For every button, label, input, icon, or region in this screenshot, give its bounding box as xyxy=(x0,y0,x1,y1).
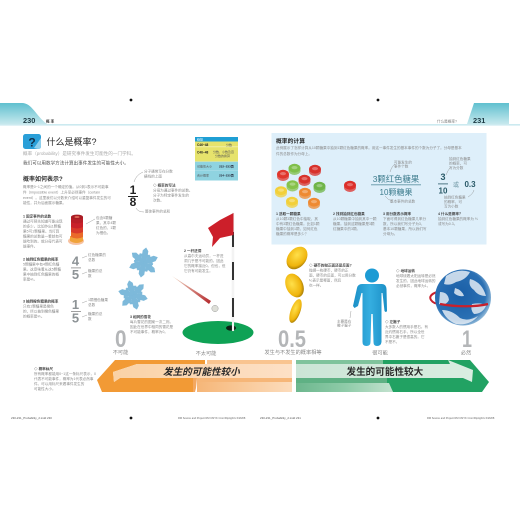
label: likely: 很可能 xyxy=(372,348,388,356)
panel steps: 基本10颗糖果，所以我们写 xyxy=(383,226,427,231)
text: probability scale: 代表不可能事件，概率为1代表必然事 xyxy=(34,376,94,381)
fraction: 3/10 or 0.3: 的概率，可 xyxy=(444,199,462,204)
table: 分数的换算 xyxy=(215,153,230,158)
registration marks: 230-231_Probability_2.indd 231 xyxy=(260,416,301,420)
text: coin note xyxy=(309,262,356,288)
text: red candy probability: 2 抽到红色糖果的概率 xyxy=(23,256,59,262)
fraction: 3/10 or 0.3: 抽到红色糖果 xyxy=(444,194,466,200)
text: earth note xyxy=(396,268,436,288)
fraction: 1/5: 1 xyxy=(72,297,79,312)
panel steps: 下面可得到红色糖果几率分 xyxy=(383,216,427,221)
label: unlikely: 不太可能 xyxy=(196,349,216,357)
intro text xyxy=(23,150,136,166)
icon: single red candy xyxy=(344,181,356,192)
fraction: 1/8 with notes: 分母为通过事件的总数。 xyxy=(153,188,193,192)
text: snow note: 每片雪花的图案一次二则。 xyxy=(130,319,173,324)
fraction: 1/8 with notes: 次数。 xyxy=(153,198,164,202)
text: probability scale: 件。可以用标尺来看事件发生的 xyxy=(34,381,85,386)
fraction: 3/10 or 0.3: 3 xyxy=(440,172,446,182)
callout: right handed xyxy=(337,311,352,328)
text: red candy probability: 果。这意味着从这5颗糖 xyxy=(23,266,61,272)
number: 0 impossible: 不可能 xyxy=(113,348,128,356)
panel steps: 红糖果中的3颗。 xyxy=(333,226,360,231)
text: left-handed note: 近约惯用右手，所以全世 xyxy=(385,329,425,334)
fraction: 3 red candies over 10 candies: 基本事件的总数 xyxy=(390,198,416,204)
panel steps: 糖果的概率是多少？ xyxy=(276,231,308,236)
fraction: 1/8 with notes xyxy=(128,168,193,214)
fraction: 1/5: 数 xyxy=(88,316,92,321)
panel: calculating probability xyxy=(272,133,486,244)
panel steps: 3 用分数表示概率 xyxy=(383,211,412,216)
table: C46~48 xyxy=(197,150,208,154)
fraction: 3/10 or 0.3: 0.3 xyxy=(464,180,476,189)
text: golf note: 它的概率接近0。但也，但 xyxy=(184,263,226,268)
text: probability scale: 可能性大小。 xyxy=(34,386,56,391)
icon: question mark: ? xyxy=(28,136,36,150)
panel heading: 概率的计算 xyxy=(276,137,305,145)
icon: golf ball with trail xyxy=(172,276,218,312)
text: coin note: 也一样。 xyxy=(309,282,323,288)
text: coin note: 面，硬币的反面，可以用分数 xyxy=(309,272,356,278)
page header left: 230 xyxy=(23,116,35,125)
text: candy tube: 的多少。比如作出1颗糖 xyxy=(23,224,61,228)
text: probability scale xyxy=(34,366,96,391)
arrow: more likely: 发生的可能性较大 xyxy=(346,366,424,378)
page header right xyxy=(437,103,509,125)
fraction: 1/5: 5 xyxy=(72,310,79,326)
fraction: 4/5 xyxy=(71,252,106,282)
panel steps: 糖果中抽到1颗，如何红色 xyxy=(276,226,318,231)
text: earth note: 发生的，因此地球运转的 xyxy=(396,278,436,283)
text: coin note: ◇ 硬币的抛正面还是反面? xyxy=(309,262,352,268)
fraction: 1/8 with notes: 分子通常写在分数 xyxy=(144,168,173,174)
icon: snowflakes xyxy=(114,245,162,314)
text: golf note: 2 一杆进洞 xyxy=(184,248,202,253)
page header right: 231 xyxy=(473,116,485,125)
table: 分数、小数及百 xyxy=(213,149,234,154)
number: 1 certain: 1 xyxy=(462,326,472,353)
text: red candy probability: 5颗糖果中有4颗红色糖 xyxy=(23,262,60,266)
panel steps: 从10颗糖果中抽到其中一颗 xyxy=(333,216,377,221)
callout: candy stack: 红色的，1颗 xyxy=(96,225,116,230)
fraction: 1/5: 总数 xyxy=(88,302,96,307)
text: probability scale: ◇ 概率标尺 xyxy=(34,366,53,371)
registration marks xyxy=(11,99,495,420)
text: earth note: 地球绕着太阳运转是必然 xyxy=(396,273,436,278)
page header right: 什么是概率? xyxy=(437,118,457,124)
text: orange candy probability: 的概率是⅕。 xyxy=(23,314,44,318)
number: 0 impossible: 0 xyxy=(115,326,126,353)
number: 1 certain xyxy=(461,326,472,356)
page header left xyxy=(0,103,520,125)
text: orange candy probability: 3 抽到橙色糖果的概率 xyxy=(23,298,59,304)
text: snow note: 不可能事件，概率为0。 xyxy=(130,329,168,334)
fraction: 3/10 or 0.3: 写为小数 xyxy=(444,204,459,208)
section: how to express probability: 件（impossible event）上升至必然事件（certain xyxy=(23,189,100,194)
panel intro text: 此例展示了怎样计算从10颗糖果中抽到1颗红色糖果的概率。用这一事件发生的基本事件的个数为分子了。分母是基本 xyxy=(276,145,462,150)
text: left-handed note: ◇ 左撇子 xyxy=(385,319,401,324)
fraction: 3/10 or 0.3 xyxy=(438,156,476,208)
fraction: 4/5: 数 xyxy=(88,273,92,278)
fraction: 1/8 with notes: 分子为特定事件发生的 xyxy=(153,192,189,198)
fraction: 3/10 or 0.3: 写为分数 xyxy=(449,165,464,170)
text: candy tube: 通过可预先知道可能出现 xyxy=(23,218,63,224)
table: 234~235页 xyxy=(219,174,234,178)
icon: falling coins xyxy=(282,243,312,324)
callout: candy stack: 为橙色。 xyxy=(96,230,110,235)
panel steps: 中有3颗红色糖果。比如1颗 xyxy=(276,221,320,226)
text: earth note: ◇ 地球运转 xyxy=(396,268,415,273)
text: left-handed note: 不是不。 xyxy=(385,339,399,344)
text: earth note: 必然事件，概率为1。 xyxy=(396,283,430,288)
text: golf note xyxy=(184,248,226,273)
fraction: 3/10 or 0.3: 抽到红色糖果 xyxy=(449,156,471,161)
fraction: 1/8 with notes: 1 xyxy=(130,183,137,197)
icon: golf flag and green xyxy=(182,213,254,344)
text: snow note: 因此在世界中相同的雪花是 xyxy=(130,324,174,329)
fraction: 1/8 with notes: 整体事件的总和 xyxy=(145,208,171,214)
registration marks: 230-231_Probability_2.indd 230 xyxy=(11,416,52,420)
fraction: 3 red candies over 10 candies: 事件个数 xyxy=(394,164,409,168)
intro text: 概率（probability）是研究事件发生可能性的一门学科。 xyxy=(23,150,136,157)
title: 什么是概率? xyxy=(46,136,97,147)
arrow: less likely: 发生的可能性较小 xyxy=(163,366,240,378)
table: 合计概率 xyxy=(197,172,209,178)
text: golf note: 洞几乎是不可能的。因此 xyxy=(184,258,224,263)
text: left-handed note: 界中右撇子是很高的。它 xyxy=(385,334,425,339)
fraction: 1/5: 1颗橙色糖果 xyxy=(88,297,108,302)
registration marks: RM Source and Project RM CMYK Cron/Fliptight/x 6/26/08 xyxy=(427,416,495,420)
callout: candy stack: 包含5颗糖 xyxy=(96,215,113,220)
section: how to express probability: event）。这里我们以分数来介绍可以重复事件发生的可 xyxy=(23,195,111,200)
number: 0.5 even: 发生与不发生的概率相等 xyxy=(264,348,322,356)
panel intro text xyxy=(276,145,462,156)
panel steps: 分母为。 xyxy=(383,231,397,236)
fraction: 3/10 or 0.3: 或 xyxy=(453,181,459,189)
text: golf note: 从高尔夫运动员，一杆进 xyxy=(184,253,224,258)
fraction: 3 red candies over 10 candies xyxy=(371,160,421,204)
icon: earth with orbit xyxy=(430,270,491,326)
intro text: 我们可以用数学方法计算出事件发生的可能性大小。 xyxy=(23,160,129,166)
text: candy tube: 能吃到的。就分母代表可 xyxy=(23,238,63,244)
number: 1 certain: 必然 xyxy=(461,348,471,356)
icon: ten candies xyxy=(275,164,326,209)
fraction: 3 red candies over 10 candies: 3颗红色糖果 xyxy=(373,174,420,184)
fraction: 1/5: 糖果的总 xyxy=(88,311,103,316)
text: golf note: 它仍有可能发生。 xyxy=(184,268,213,273)
text: candy tube: 能事件。 xyxy=(23,244,37,248)
panel steps: 4 什么是概率？ xyxy=(438,211,463,216)
section: how to express probability: 能性，并为后面展示糖果。 xyxy=(23,200,66,205)
text: left-handed note: 大多数人的惯用手是右。有 xyxy=(385,324,429,329)
section: how to express probability xyxy=(23,175,111,205)
fraction: 3/10 or 0.3: 的概率，可 xyxy=(449,160,467,166)
text: candy tube: 糖果的总数量一看就有可 xyxy=(23,234,63,238)
panel steps: 1 选取一颗糖果 xyxy=(276,211,301,216)
fraction: 1/5 xyxy=(71,297,108,326)
fraction: 3/10 or 0.3: 10 xyxy=(439,186,448,196)
text: snow note: 3 相同的雪花 xyxy=(130,314,151,319)
icon: person xyxy=(353,268,387,346)
callout: candy stack xyxy=(86,215,116,235)
panel steps: 数，所以我们写分子为3， xyxy=(383,221,425,226)
fraction: 4/5: 5 xyxy=(72,267,79,282)
callout: right handed: 撇子骗子 xyxy=(337,322,352,328)
callout: right handed: 主要是右 xyxy=(337,318,352,324)
panel steps: 从10颗3颗红色中抽取，其 xyxy=(276,216,318,221)
fraction: 3 red candies over 10 candies: 可能发生的 xyxy=(394,160,412,164)
callout: candy stack: 果，其中4颗 xyxy=(96,220,116,225)
icon: question mark xyxy=(23,134,41,150)
text: orange candy probability xyxy=(23,298,59,318)
table: 分数 xyxy=(226,142,232,147)
text: orange candy probability: 的，所以抽到橙色糖果 xyxy=(23,308,59,314)
fraction: 1/8 with notes: 横线的上面 xyxy=(144,174,162,178)
panel steps xyxy=(276,211,478,236)
number: 0.5 even xyxy=(264,326,322,356)
number: 0.5 even: 0.5 xyxy=(278,326,306,353)
table: 可能性大小 xyxy=(197,164,212,168)
fraction: 1/8 with notes: 8 xyxy=(130,195,137,209)
section: how to express probability: 概率如何表示? xyxy=(23,175,63,183)
text: red candy probability: 果中抽到红色糖果的概 xyxy=(23,272,59,276)
page header left: 概 率 xyxy=(46,118,55,124)
text: red candy probability: 率是⅘。 xyxy=(23,276,37,282)
text: candy tube: 果5可1颗糖果。当打算 xyxy=(23,228,60,234)
table: 链接 xyxy=(197,137,203,142)
fraction: 1/8 with notes: ◇ 概率的写法 xyxy=(153,182,176,188)
fraction: 4/5: 糖果的总 xyxy=(88,268,103,273)
panel steps: 抽到红色糖果的概率为 ⅓ xyxy=(438,216,478,221)
registration marks: RM Source and Project RM CMYK Cron/Fliptight/x 6/26/08 xyxy=(178,416,246,420)
text: candy tube xyxy=(23,214,63,248)
arrow: less likely xyxy=(97,360,292,392)
fraction: 4/5: 红色糖果的 xyxy=(88,252,106,257)
table: C46~48 xyxy=(197,143,208,147)
text: left-handed note xyxy=(385,319,429,344)
panel steps: 糖果。抽到这颗糖果是3颗 xyxy=(333,221,375,226)
text: snow note xyxy=(130,314,174,334)
text: orange candy probability: 只有1颗糖果是橙色 xyxy=(23,304,54,308)
arrow: more likely xyxy=(296,360,489,392)
text: candy tube: 1 固定事件的总数 xyxy=(23,214,52,218)
text: coin note: 抛掷一枚硬币，硬币的正 xyxy=(309,268,349,272)
icon: candy stack xyxy=(68,215,84,245)
fraction: 4/5: 总数 xyxy=(88,257,96,262)
fraction: 4/5: 4 xyxy=(72,254,80,268)
panel steps: 或写为0.3。 xyxy=(438,221,457,226)
table xyxy=(195,137,238,180)
panel intro text: 件的总数作为分母上。 xyxy=(276,151,312,156)
text: probability scale: 所有概率都能用0~1这一条标尺表示，0 xyxy=(34,371,96,376)
table: 232~233页 xyxy=(219,164,234,168)
text: red candy probability xyxy=(23,256,61,282)
text: coin note: ⅟₂表示是哪面，然后 xyxy=(309,278,342,282)
section: how to express probability: 概率是0~1之间的一个确定的值。从0到1表示不可能事 xyxy=(23,184,109,189)
fraction: 3 red candies over 10 candies: 10颗糖果 xyxy=(380,187,412,197)
panel steps: 2 找到抽到红色糖果 xyxy=(333,211,365,216)
